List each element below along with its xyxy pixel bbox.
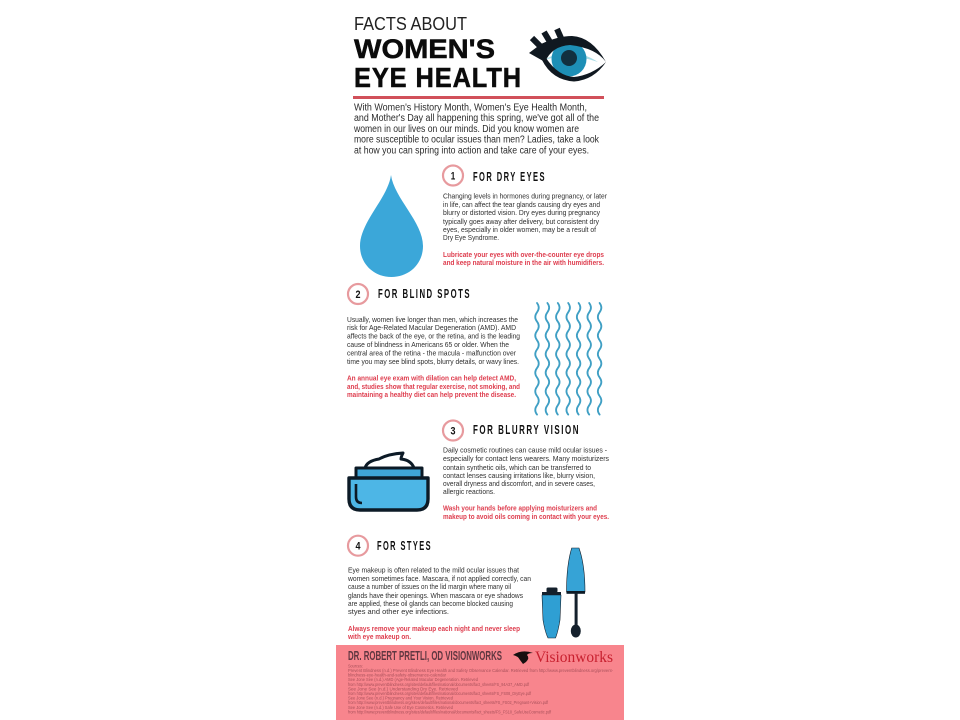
tip text 1: Lubricate your eyes with over-the-counter eye drops (443, 250, 604, 259)
body text 3 (443, 446, 609, 496)
body text 2: central area of the retina - the macula - malfunction over (347, 348, 516, 358)
body text 1: eyes, especially in older women, may be a result of (443, 225, 597, 234)
sources list: Sources: (348, 664, 363, 668)
body text 1: blurry or distorted vision. Dry eyes during pregnancy (443, 208, 600, 217)
body text 2: affects the back of the eye, or the retina, and is the leading (347, 332, 520, 340)
tip text 1: and keep natural moisture in the air with humidifiers. (443, 258, 604, 267)
intro text (353, 102, 599, 156)
sources list: See Jone See (n.d.) Safe Use of Eye Cosmetics. Retrieved (348, 705, 454, 710)
heading: for dry eyes: FOR DRY EYES (473, 170, 546, 184)
sources list: from http://www.preventblindness.org/sites/default/files/national/documents/fact_sheets/FS_FS10_SafeUseCosmetic.pdf (348, 709, 552, 714)
body text 4: women sometimes face. Mascara, if not applied correctly, can (347, 574, 531, 583)
body text 1: typically goes away after delivery, but consistent dry (443, 217, 599, 226)
body text 2 (347, 315, 520, 366)
sources list: from http://www.preventblindness.org/sites/default/files/national/documents/fact_sheets/FS_94A37_AMD.pdf (348, 682, 530, 687)
body text 1: Dry Eye Syndrome. (443, 233, 499, 242)
body text 4: glands have their openings. When mascara or eye shadows (348, 591, 523, 600)
red divider (353, 96, 604, 99)
tip text 3 (443, 504, 609, 521)
body text 4: Eye makeup is often related to the mild ocular issues that (348, 566, 519, 574)
icon: water drop (360, 175, 423, 277)
title block: EYE HEALTH (354, 62, 522, 93)
body text 3: contain synthetic oils, which can be transferred to (443, 463, 591, 472)
icon: visionworks eye logo (513, 651, 533, 664)
body text 3: allergic reactions. (443, 487, 495, 496)
body text 1: Changing levels in hormones during pregnancy, or later (443, 192, 607, 200)
mascara wand (566, 548, 585, 638)
tip text 2 (347, 374, 520, 399)
sources list: See Jone See (n.d.) Pregnancy and Your Vision. Retrieved (348, 696, 454, 701)
body text 1 (443, 192, 607, 242)
tip text 2: An annual eye exam with dilation can help detect AMD, (347, 374, 516, 382)
intro text: at how you can spring into action and take care of your eyes. (354, 145, 589, 156)
sources list: Prevent Blindness (n.d.) Prevent Blindness Eye Health and Safety Observance Calendar. Retrieved from http://www.preventblindness.org/prevent- (348, 668, 614, 673)
number badge 1: 1 (451, 170, 455, 182)
body text 4 (347, 566, 531, 616)
footer heading: DR. ROBERT PRETLI, OD VISIONWORKS (348, 649, 502, 663)
icon: mascara (542, 548, 585, 638)
tip text 4: Always remove your makeup each night and never sleep (348, 624, 520, 633)
number badge 1 (443, 166, 463, 186)
panel: for blurry vision (443, 420, 609, 521)
heading: for styes: FOR STYES (377, 539, 432, 553)
tip text 1 (443, 250, 604, 267)
body text 4: are applied, these oil glands can become blocked causing (348, 599, 513, 608)
heading: for blind spots: FOR BLIND SPOTS (378, 287, 471, 301)
body text 2: cause of blindness in Americans 65 or older. When the (347, 340, 509, 349)
tip text 2: and, studies show that regular exercise, not smoking, and (347, 382, 520, 391)
sources list (348, 664, 614, 714)
number badge 4 (348, 536, 368, 556)
intro text: and Mother's Day all happening this spring, we've got all of the (354, 113, 599, 124)
body text 2: time you may see blind spots, blurry details, or wavy lines. (347, 357, 519, 366)
body text 3: Daily cosmetic routines can cause mild ocular issues - (443, 446, 607, 454)
number badge 3 (443, 420, 463, 440)
sources list: See Jone See (n.d.) AMD (Age-Related Macular Degeneration. Retrieved (348, 677, 479, 682)
icon: eye (529, 29, 606, 82)
sources list: See Jone See (n.d.) Understanding Dry Eye. Retrieved (348, 686, 459, 691)
mascara tube (542, 588, 561, 638)
icon: wavy lines (535, 303, 601, 415)
sources list: from http://www.preventblindness.org/sites/default/files/national/documents/fact_sheets/FS_FS02_Pregnant+Vision.pdf (348, 700, 549, 705)
panel: for styes (347, 536, 531, 641)
panel: for dry eyes (443, 166, 607, 267)
tip text 4: with eye makeup on. (347, 632, 411, 641)
number badge 4: 4 (356, 541, 361, 553)
sources list: from http://www.preventblindness.org/sites/default/files/national/documents/fact_sheets/FS_FS08_DryEye.pdf (348, 691, 532, 696)
number badge 2: 2 (356, 289, 360, 301)
tip text 4 (347, 624, 520, 641)
title block (354, 14, 522, 93)
tip text 2: maintaining a healthy diet can help prevent the disease. (347, 390, 516, 399)
body text 3: especially for contact lens wearers. Many moisturizers (443, 454, 609, 463)
heading: for blurry vision: FOR BLURRY VISION (473, 423, 580, 437)
icon: cream jar (349, 453, 428, 510)
body text 2: Usually, women live longer than men, which increases the (347, 315, 518, 324)
visionworks wordmark: Visionworks (535, 649, 613, 666)
tip text 3: makeup to avoid oils coming in contact with your eyes. (443, 512, 609, 521)
body text 4: styes and other eye infections. (348, 607, 449, 616)
number badge 3: 3 (450, 426, 456, 438)
body text 1: in life, can affect the tear glands causing dry eyes and (443, 200, 600, 209)
body text 4: cause a number of issues on the lid margin where many oil (348, 582, 511, 591)
panel: footer (336, 645, 624, 720)
tip text 3: Wash your hands before applying moisturizers and (443, 504, 597, 512)
panel: for blind spots (347, 284, 520, 399)
intro text: With Women's History Month, Women's Eye Health Month, (354, 102, 587, 114)
body text 3: overall dryness and discomfort, and in severe cases, (443, 479, 595, 488)
number badge 2 (348, 284, 368, 304)
title block: FACTS ABOUT (354, 14, 467, 34)
body text 3: contact lenses causing irritations like, blurry vision, (443, 471, 595, 480)
intro text: women in our lives on our minds. Did you know women are (353, 124, 579, 135)
intro text: more susceptible to ocular issues than men? Ladies, take a look (354, 135, 599, 146)
body text 2: risk for Age-Related Macular Degeneration (AMD). AMD (347, 323, 516, 332)
sources list: blindness-eye-health-and-safety-observance-calendar (348, 673, 447, 678)
title block: WOMEN'S (354, 34, 495, 64)
